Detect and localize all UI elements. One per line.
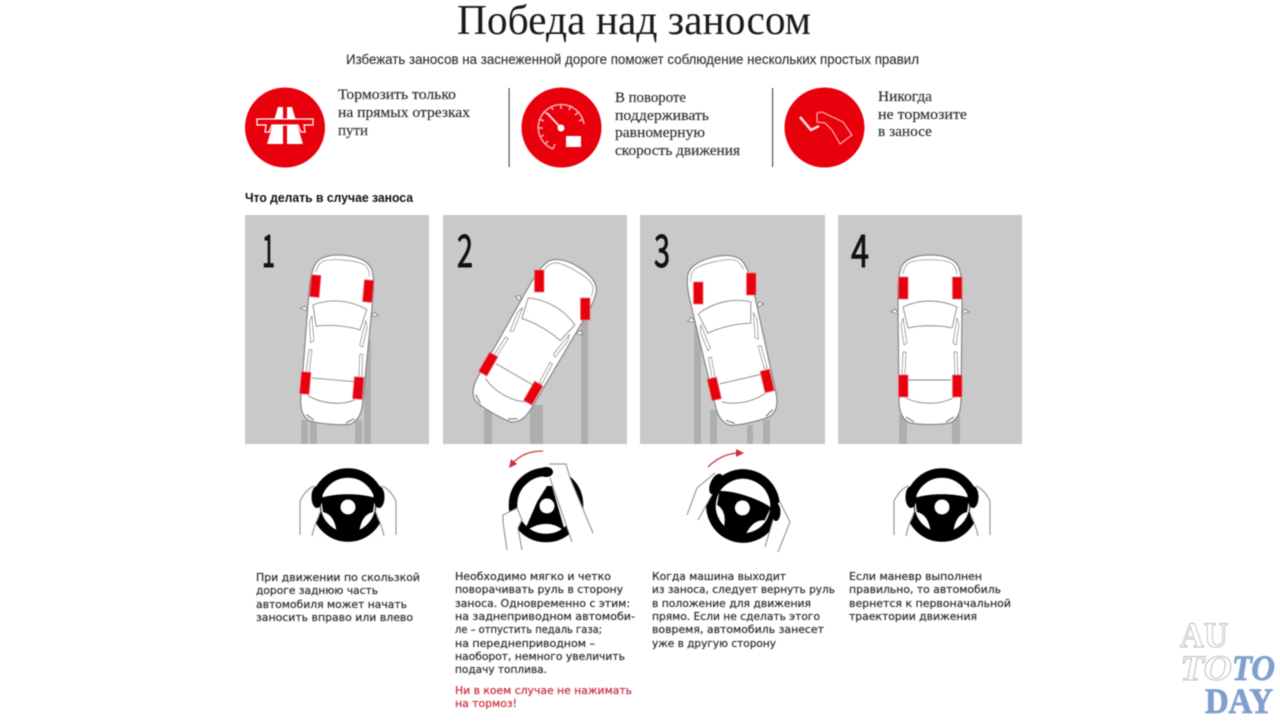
number 4: 4 bbox=[851, 215, 869, 280]
car bbox=[459, 247, 611, 433]
watermark logo: TO bbox=[1232, 648, 1275, 688]
tyre tracks bbox=[301, 340, 371, 444]
rule 2 text: В повороте bbox=[615, 90, 686, 106]
warning text: на тормоз! bbox=[455, 697, 517, 710]
rule 1 text: Тормозить только bbox=[338, 87, 456, 103]
text column 1: заносить вправо или влево bbox=[256, 611, 413, 624]
icon: foot on pedal bbox=[784, 88, 864, 168]
number 2: 2 bbox=[457, 215, 473, 280]
rule 1: brake only on straight road bbox=[245, 87, 471, 168]
text column 3: уже в другую сторону bbox=[652, 637, 776, 650]
text column 4: траектории движения bbox=[849, 610, 977, 623]
text column 3 bbox=[652, 570, 835, 650]
arrow: turn right bbox=[708, 449, 744, 467]
red wheels bbox=[694, 273, 774, 401]
warning text bbox=[455, 684, 632, 710]
rule 3 text: Никогда bbox=[878, 89, 932, 105]
car bbox=[891, 255, 969, 424]
icon: road under bridge bbox=[245, 88, 325, 168]
text column 2: подачу топлива. bbox=[455, 663, 547, 676]
panel 2: steer into the skid bbox=[443, 215, 627, 444]
rule 1 text bbox=[338, 87, 471, 139]
rule 3 text bbox=[878, 89, 967, 140]
text column 3: из заноса, следует вернуть руль bbox=[652, 583, 835, 596]
red wheels bbox=[898, 277, 962, 397]
tyre tracks bbox=[694, 320, 770, 444]
steering wheel 4 bbox=[894, 473, 990, 539]
number 1: 1 bbox=[262, 215, 275, 280]
text column 4: Если маневр выполнен bbox=[849, 570, 982, 583]
section heading: Что делать в случае заноса bbox=[245, 190, 414, 205]
arrow: turn left bbox=[509, 451, 543, 468]
warning text: Ни в коем случае не нажимать bbox=[455, 684, 632, 697]
watermark logo: DAY bbox=[1205, 681, 1273, 721]
number 3: 3 bbox=[654, 215, 670, 280]
text column 1: При движении по скользкой bbox=[256, 571, 420, 584]
text column 2: наоборот, немного увеличить bbox=[455, 650, 625, 663]
text column 3: прямо. Если не сделать этого bbox=[652, 610, 820, 623]
rule 1 text: на прямых отрезках bbox=[338, 105, 471, 121]
text column 2: на заднеприводном автомоби- bbox=[455, 610, 635, 623]
car bbox=[291, 252, 383, 428]
text column 4: правильно, то автомобиль bbox=[849, 583, 1001, 596]
rule 1 text: пути bbox=[338, 123, 368, 139]
panel 4: car back on trajectory bbox=[838, 215, 1022, 444]
tyre tracks bbox=[484, 320, 588, 444]
text column 2: заноса. Одновременно с этим: bbox=[455, 597, 630, 610]
rule 2 text: поддерживать bbox=[615, 108, 709, 124]
icon: speedometer bbox=[522, 88, 602, 168]
car bbox=[675, 248, 789, 431]
text column 3: Когда машина выходит bbox=[652, 570, 787, 583]
watermark logo: TO bbox=[1180, 648, 1232, 688]
rule 3 text: в заносе bbox=[878, 124, 932, 140]
text column 2: Необходимо мягко и четко bbox=[455, 570, 611, 583]
red wheels bbox=[479, 270, 590, 405]
rule 2 text: скорость движения bbox=[615, 143, 740, 159]
text column 4: вернется к первоначальной bbox=[849, 597, 1011, 610]
text column 2: ле – отпустить педаль газа; bbox=[455, 623, 602, 636]
text column 3: в положение для движения bbox=[652, 597, 811, 610]
text column 4 bbox=[849, 570, 1011, 623]
rule 3 text: не тормозите bbox=[878, 107, 967, 123]
text column 1 bbox=[256, 571, 420, 624]
watermark logo bbox=[1180, 615, 1275, 721]
text column 3: вовремя, автомобиль занесет bbox=[652, 623, 825, 636]
red wheels bbox=[300, 275, 374, 399]
text column 2: на переднеприводном – bbox=[455, 637, 595, 650]
rule 2 text: равномерную bbox=[615, 125, 705, 141]
text column 2 bbox=[455, 570, 635, 676]
steering wheel 2 with hands and arrow bbox=[503, 451, 593, 550]
steering wheel 1 bbox=[300, 473, 396, 539]
text column 1: автомобиля может начать bbox=[256, 598, 407, 611]
subtitle: Избежать заносов на заснеженной дороге поможет соблюдение нескольких простых правил bbox=[346, 51, 919, 67]
rule 3: never brake in a skid bbox=[784, 88, 967, 168]
steering wheel 3 with hands and arrow bbox=[687, 449, 790, 552]
watermark logo: AU bbox=[1180, 615, 1228, 655]
rule 2: keep even speed in a turn bbox=[522, 88, 740, 168]
panel 1: car begins to skid bbox=[245, 215, 429, 444]
rule 2 text bbox=[615, 90, 740, 159]
panel 3: return the wheel straight bbox=[640, 215, 825, 444]
tyre tracks bbox=[899, 415, 960, 444]
text column 2: поворачивать руль в сторону bbox=[455, 583, 623, 596]
text column 1: дороге заднюю часть bbox=[256, 584, 378, 597]
